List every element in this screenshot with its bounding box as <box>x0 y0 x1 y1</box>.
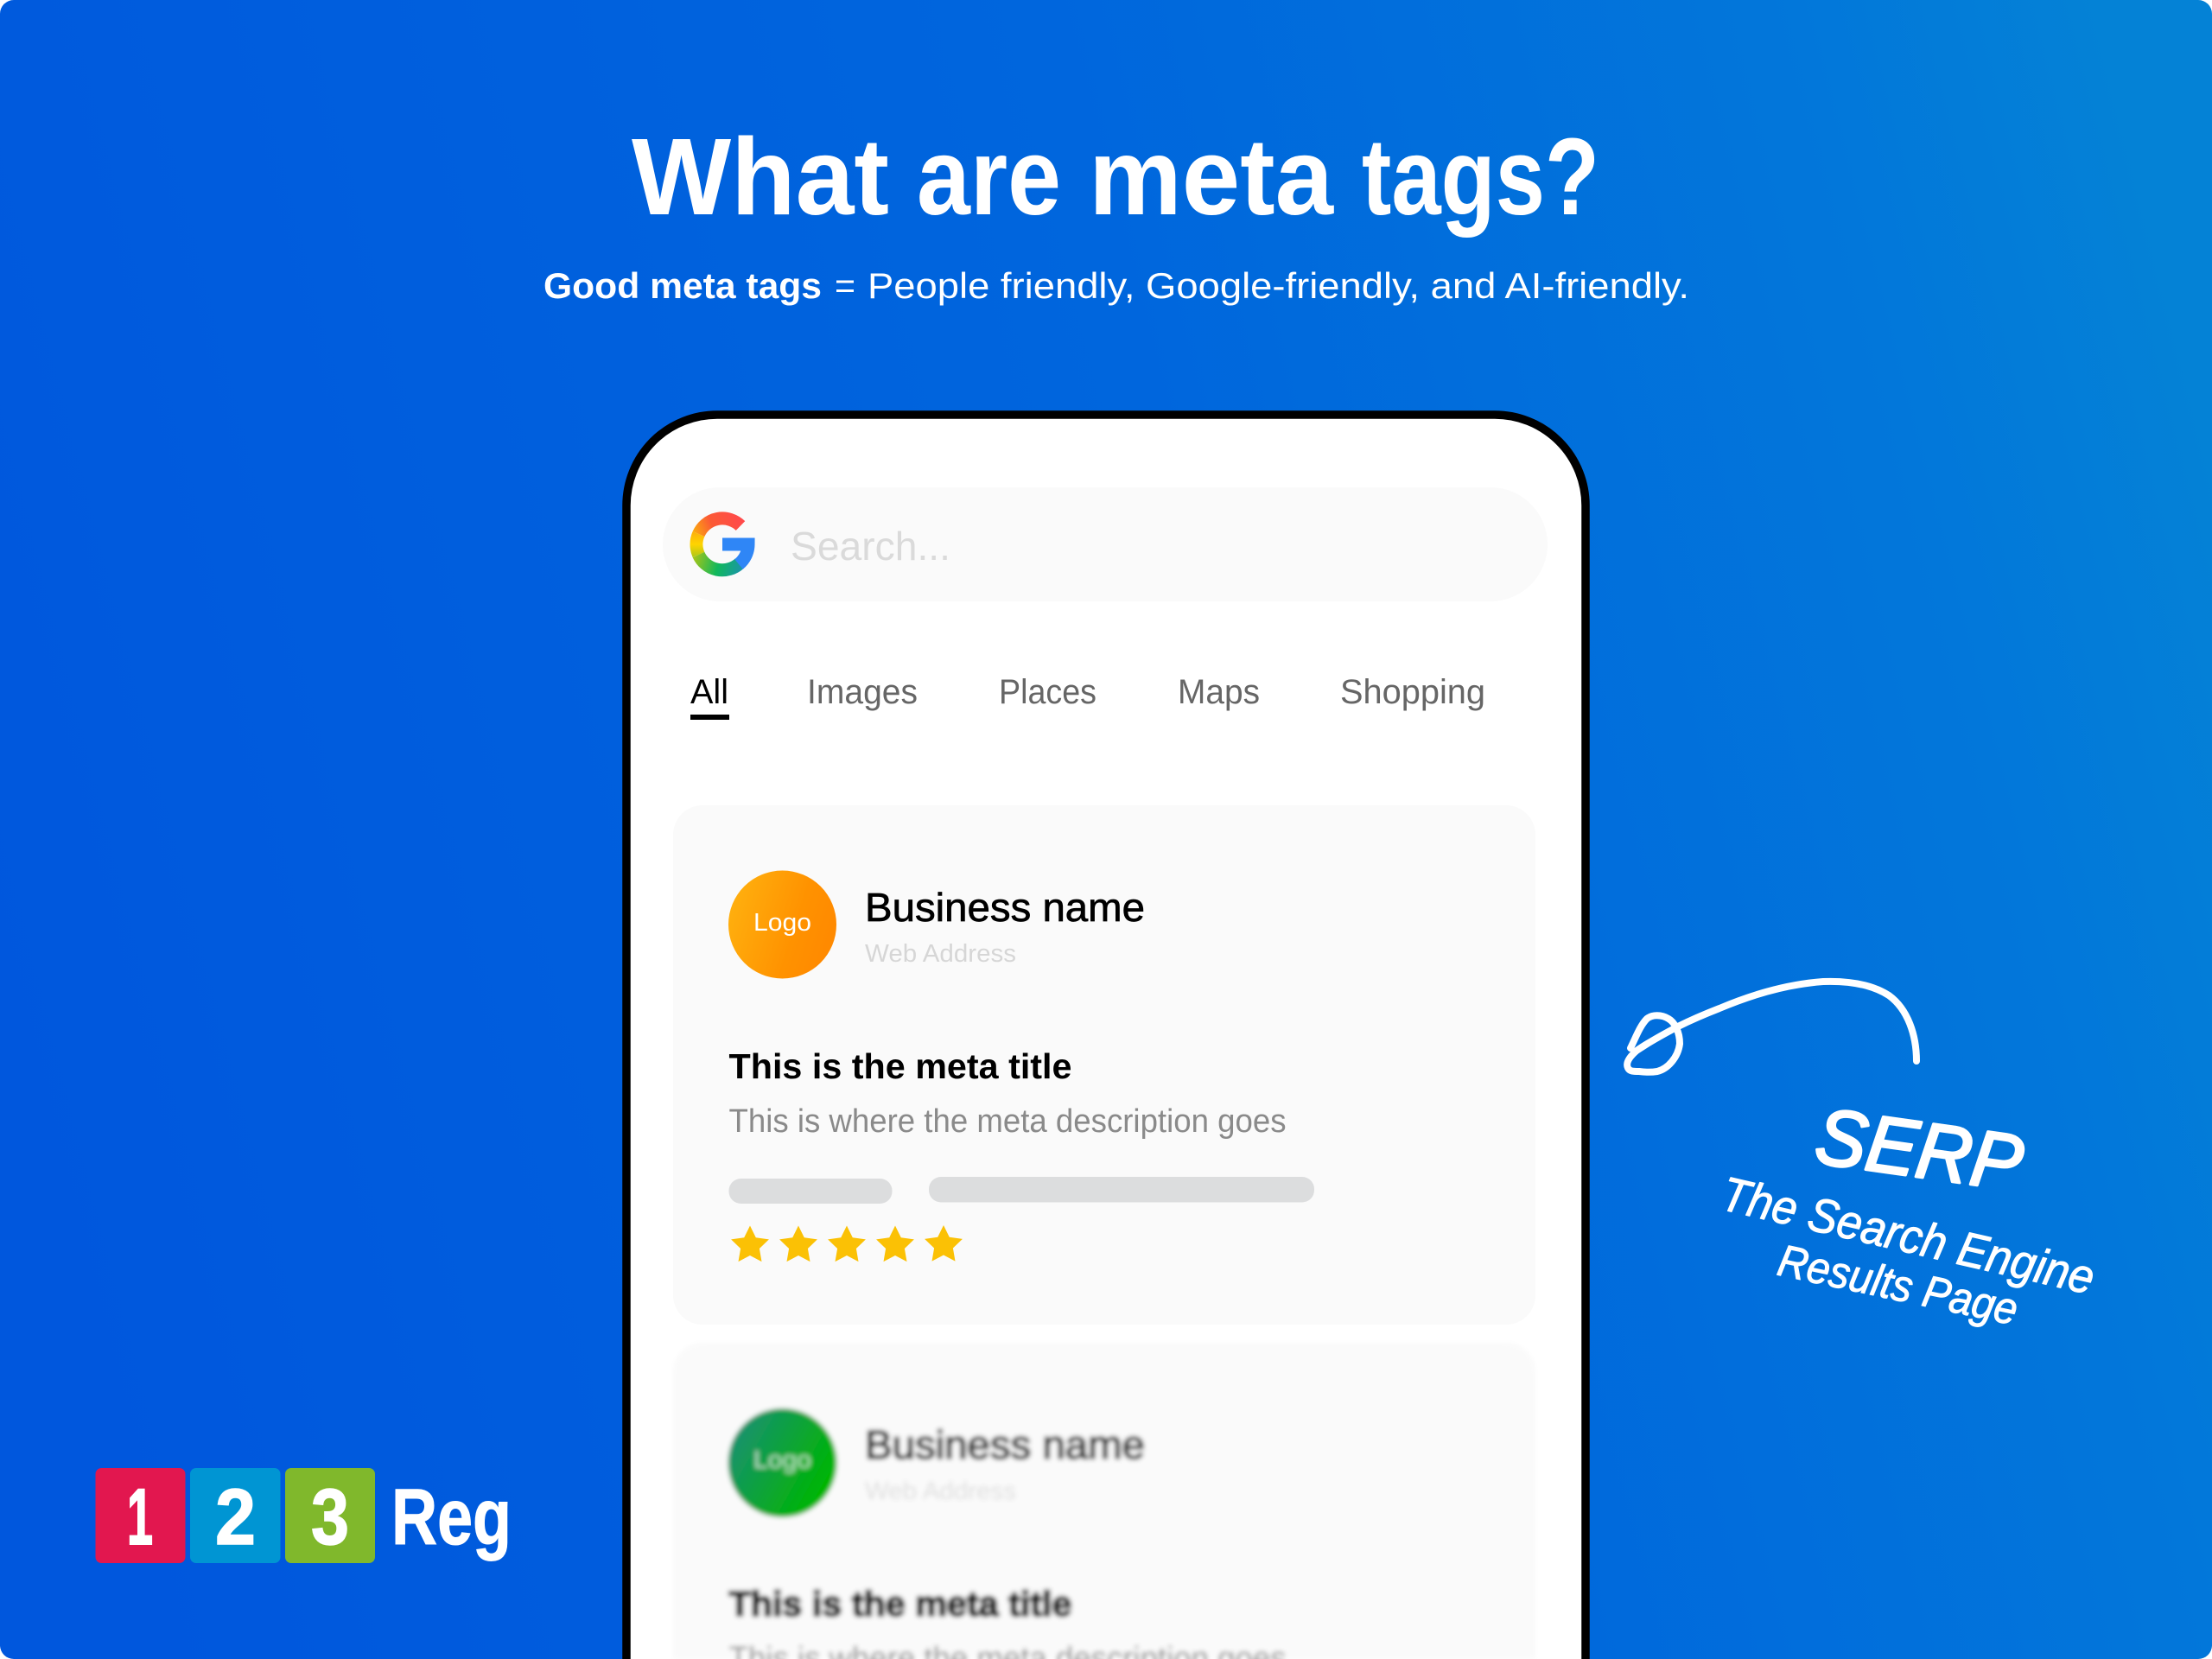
logo wordmark: Reg: Reg <box>391 1473 512 1561</box>
business name: Business name <box>865 885 1145 930</box>
title: tags? <box>1362 116 1599 238</box>
icon: green logo: Logo <box>753 1446 811 1474</box>
active tab: All: All <box>690 673 728 711</box>
logo tile: 1 <box>95 1468 185 1563</box>
label: SERP acronym: SERP <box>1810 1092 2028 1208</box>
blurred web address: Web Address <box>865 1478 1016 1505</box>
web address: Web Address <box>865 940 1016 968</box>
blurred meta title: This is the meta title <box>729 1584 1071 1624</box>
search bar <box>663 487 1548 601</box>
handwritten label: SERP <box>1716 1092 2100 1335</box>
title: meta <box>1089 116 1334 238</box>
logo tile: 2 <box>190 1468 280 1563</box>
blurred business name: Business name <box>865 1422 1145 1467</box>
subtitle: Good meta tags <box>543 265 822 306</box>
search placeholder: Search... <box>791 524 950 569</box>
logo tile: 2: 2 <box>215 1473 256 1561</box>
meta description: This is where the meta description goes <box>729 1103 1286 1140</box>
label: Results Page: Results Page <box>1774 1236 2022 1335</box>
subtitle <box>543 265 1689 306</box>
icon: orange logo <box>728 871 836 978</box>
title: are <box>917 116 1061 238</box>
icon: green logo <box>728 1408 836 1517</box>
label: The Search Engine: The Search Engine <box>1716 1166 2100 1305</box>
meta title: This is the meta title <box>729 1046 1071 1086</box>
panel: blurred search result card <box>673 1343 1535 1659</box>
logo tile: 1: 1 <box>127 1473 153 1561</box>
title <box>632 116 1599 238</box>
tab: Maps: Maps <box>1178 673 1260 711</box>
tab: Images: Images <box>807 673 918 711</box>
placeholder bars <box>729 1177 1314 1204</box>
tab: Places: Places <box>999 673 1096 711</box>
arrow: hand-drawn curve pointing to phone <box>1627 982 1916 1072</box>
phone mockup <box>626 415 1586 1659</box>
search tabs <box>690 673 1485 720</box>
tab: Shopping: Shopping <box>1340 673 1485 711</box>
subtitle: = <box>835 265 855 306</box>
panel: search result card <box>673 805 1535 1325</box>
title: What <box>632 116 889 238</box>
star rating <box>731 1225 963 1262</box>
phone frame <box>626 415 1586 1659</box>
logo tile: 3: 3 <box>311 1473 349 1561</box>
icon: Google G <box>696 518 748 570</box>
logo: 123 Reg <box>95 1468 512 1563</box>
icon: orange logo: Logo <box>753 909 811 937</box>
subtitle: People friendly, Google-friendly, and AI-friendly. <box>868 265 1689 306</box>
logo tile: 3 <box>285 1468 375 1563</box>
